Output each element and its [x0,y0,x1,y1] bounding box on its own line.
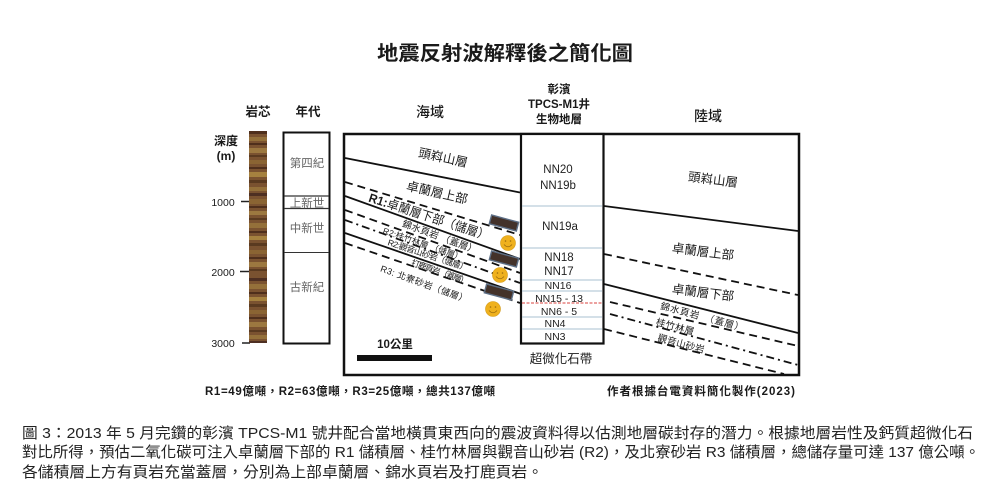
panel: seismic section frame [344,134,799,375]
offshore formation labels: R2:桂竹林層 （儲層） [382,226,464,262]
depth axis: 深度 [214,133,238,148]
age column [284,132,330,344]
offshore formation labels: 頭嵙山層 [417,146,469,170]
age column: 中新世 [290,221,324,235]
biostratigraphy column: NN15 - 13 [535,293,583,305]
heading: biostratigraphy of well: 生物地層 [536,112,582,126]
heading: core: 岩芯 [245,104,271,119]
rock core column [249,131,267,343]
biostratigraphy column: NN19b [540,180,576,192]
biostratigraphy column: NN6 - 5 [541,306,577,318]
onshore formation labels: 卓蘭層上部 [671,240,735,263]
summary: storage amounts: R1=49億噸，R2=63億噸，R3=25億噸，總共137億噸 [205,384,496,398]
age column: 上新世 [290,196,324,210]
biostratigraphy column: NN3 [544,331,566,343]
onshore formation labels: 桂竹林層 [655,316,695,338]
caption: 圖 3：2013 年 5 月完鑽的彰濱 TPCS-M1 號井配合當地橫貫東西向的震波資料得以估測地層碳封存的潛力。根據地層岩性及鈣質超微化石 [22,424,973,442]
onshore formation labels: 錦水頁岩 （蓋層） [659,300,745,334]
biostratigraphy column [521,134,604,344]
age column: 古新紀 [290,280,325,294]
onshore strata lines [604,206,798,374]
age column: 第四紀 [290,156,325,170]
biostratigraphy column: NN20 [543,164,573,176]
offshore formation labels: 錦水頁岩 （蓋層） [400,218,479,256]
onshore formation labels: 觀音山砂岩 [656,332,706,356]
offshore formation labels: R3: 北寮砂岩（儲層） [379,263,469,304]
source note: 作者根據台電資料簡化製作(2023) [607,384,795,398]
caption: 各儲積層上方有頁岩充當蓋層，分別為上部卓蘭層、錦水頁岩及打鹿頁岩。 [22,464,543,481]
heading: biostratigraphy of well: 彰濱 [548,82,571,96]
onshore formation labels [655,170,745,356]
depth axis [211,133,250,350]
biostratigraphy column: NN18 [544,252,574,264]
heading: offshore: 海域 [416,104,444,120]
biostratigraphy column: NN17 [544,266,574,278]
depth axis: 1000 [211,197,235,209]
depth axis: (m) [217,149,235,163]
icon: smiley faces [486,236,516,316]
biostratigraphy column: NN16 [545,280,572,292]
offshore strata lines [345,158,521,303]
offshore formation labels: 卓蘭層上部 [405,178,469,207]
onshore formation labels: 頭嵙山層 [687,170,739,190]
reservoir seal blocks [484,215,519,300]
biostratigraphy column: NN4 [544,318,566,330]
depth axis: 2000 [211,267,235,279]
scale bar: 10公里 [377,337,413,351]
caption: 對比所得，預估二氧化碳可注入卓蘭層下部的 R1 儲積層、桂竹林層與觀音山砂岩 (R2)，及北寮砂岩 R3 儲積層，總儲存量可達 137 億公噸。 [22,443,980,461]
offshore formation labels: 打鹿頁岩 （蓋層） [410,258,470,286]
heading: biostratigraphy of well: TPCS-M1井 [528,97,590,111]
offshore formation labels: R1:卓蘭層下部（儲層） [367,190,491,243]
caption [22,424,980,481]
depth axis: 3000 [211,338,235,350]
heading: biostratigraphy of well [528,82,590,126]
label: nannofossil zone: 超微化石帶 [530,351,592,366]
heading: age: 年代 [295,104,321,119]
onshore formation labels: 卓蘭層下部 [671,281,735,304]
biostratigraphy column: NN19a [542,221,578,233]
scale bar [357,337,432,361]
offshore formation labels [367,146,491,304]
offshore formation labels: R2:觀音山砂岩（儲層） [387,237,469,273]
heading: onshore: 陸域 [694,108,722,124]
title: 地震反射波解釋後之簡化圖 [377,41,633,65]
